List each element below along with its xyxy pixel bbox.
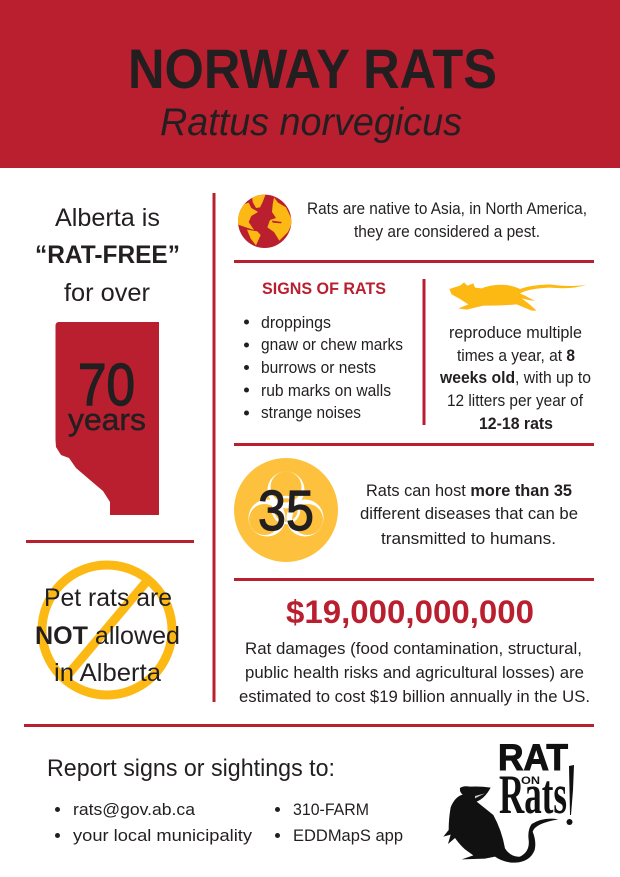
report contacts list: EDDMapS app	[293, 827, 403, 845]
icon: globe	[237, 193, 293, 248]
pet rats text: in Alberta	[54, 659, 161, 687]
reproduction text: reproduce multiple	[449, 324, 582, 342]
report contacts list: 310-FARM	[293, 801, 369, 819]
reproduction text: weeks old, with up to	[439, 369, 591, 387]
title: NORWAY RATS	[128, 37, 497, 100]
pet rats text: NOT allowed	[35, 622, 180, 650]
bullet list: droppings	[261, 314, 331, 332]
logo: rat on rats	[443, 737, 574, 863]
damages text: Rat damages (food contamination, structural,	[245, 640, 582, 658]
biohazard symbol	[248, 472, 324, 536]
bullet list: burrows or nests	[261, 359, 376, 377]
bullet list: strange noises	[261, 404, 361, 422]
logo wordmark	[498, 737, 574, 826]
panel: rat-free heading: Alberta is	[55, 204, 160, 232]
panel: signs of rats	[244, 279, 403, 422]
native to Asia text: Rats are native to Asia, in North America,	[307, 200, 587, 218]
damages text	[239, 640, 590, 706]
native to Asia text: they are considered a pest.	[354, 223, 540, 241]
diseases text: different diseases that can be	[360, 505, 578, 523]
panel: pet rats not allowed	[35, 565, 180, 695]
rat face highlight	[475, 793, 485, 798]
reproduction text	[439, 324, 591, 433]
reproduction text: times a year, at 8	[457, 347, 575, 365]
rat silhouette	[443, 786, 558, 863]
panel: rat-free heading	[35, 204, 180, 307]
native to Asia text	[307, 200, 587, 241]
label years: years	[68, 402, 146, 437]
heading: signs of rats: SIGNS OF RATS	[262, 279, 386, 298]
reproduction text: 12-18 rats	[479, 415, 553, 433]
diseases text: transmitted to humans.	[381, 530, 556, 548]
bullet list: gnaw or chew marks	[261, 336, 403, 354]
reproduction text: 12 litters per year of	[447, 392, 583, 410]
cost figure: $19,000,000,000	[286, 594, 534, 630]
report contacts list: rats@gov.ab.ca	[73, 801, 196, 819]
subtitle: Rattus norvegicus	[160, 101, 462, 144]
panel: rat-free heading: for over	[64, 279, 150, 307]
pet rats text: Pet rats are	[44, 584, 172, 612]
number 70: 70	[78, 352, 135, 418]
damages text: estimated to cost $19 billion annually in the US.	[239, 688, 590, 706]
divider lines	[24, 193, 594, 727]
bullet list: rub marks on walls	[261, 382, 391, 400]
report contacts list	[55, 801, 403, 845]
pet rats text	[35, 584, 180, 687]
report heading: Report signs or sightings to:	[47, 755, 335, 782]
header banner	[0, 0, 620, 168]
report contacts list: your local municipality	[73, 827, 253, 845]
number 35: 35	[258, 479, 314, 543]
icon: prohibition sign	[42, 565, 172, 695]
panel: rat-free heading: “RAT-FREE”	[35, 241, 180, 269]
logo wordmark: Rats	[499, 764, 567, 826]
damages text: public health risks and agricultural losses) are	[245, 664, 584, 682]
panel: Alberta map with 70 years	[56, 322, 159, 515]
diseases text: Rats can host more than 35	[366, 482, 572, 500]
logo wordmark: ON	[521, 775, 540, 787]
logo wordmark: RAT	[498, 737, 568, 778]
icon: running rat	[449, 282, 587, 311]
bullet list	[244, 314, 403, 422]
diseases text	[360, 482, 578, 548]
icon: biohazard circle with 35	[234, 458, 338, 562]
